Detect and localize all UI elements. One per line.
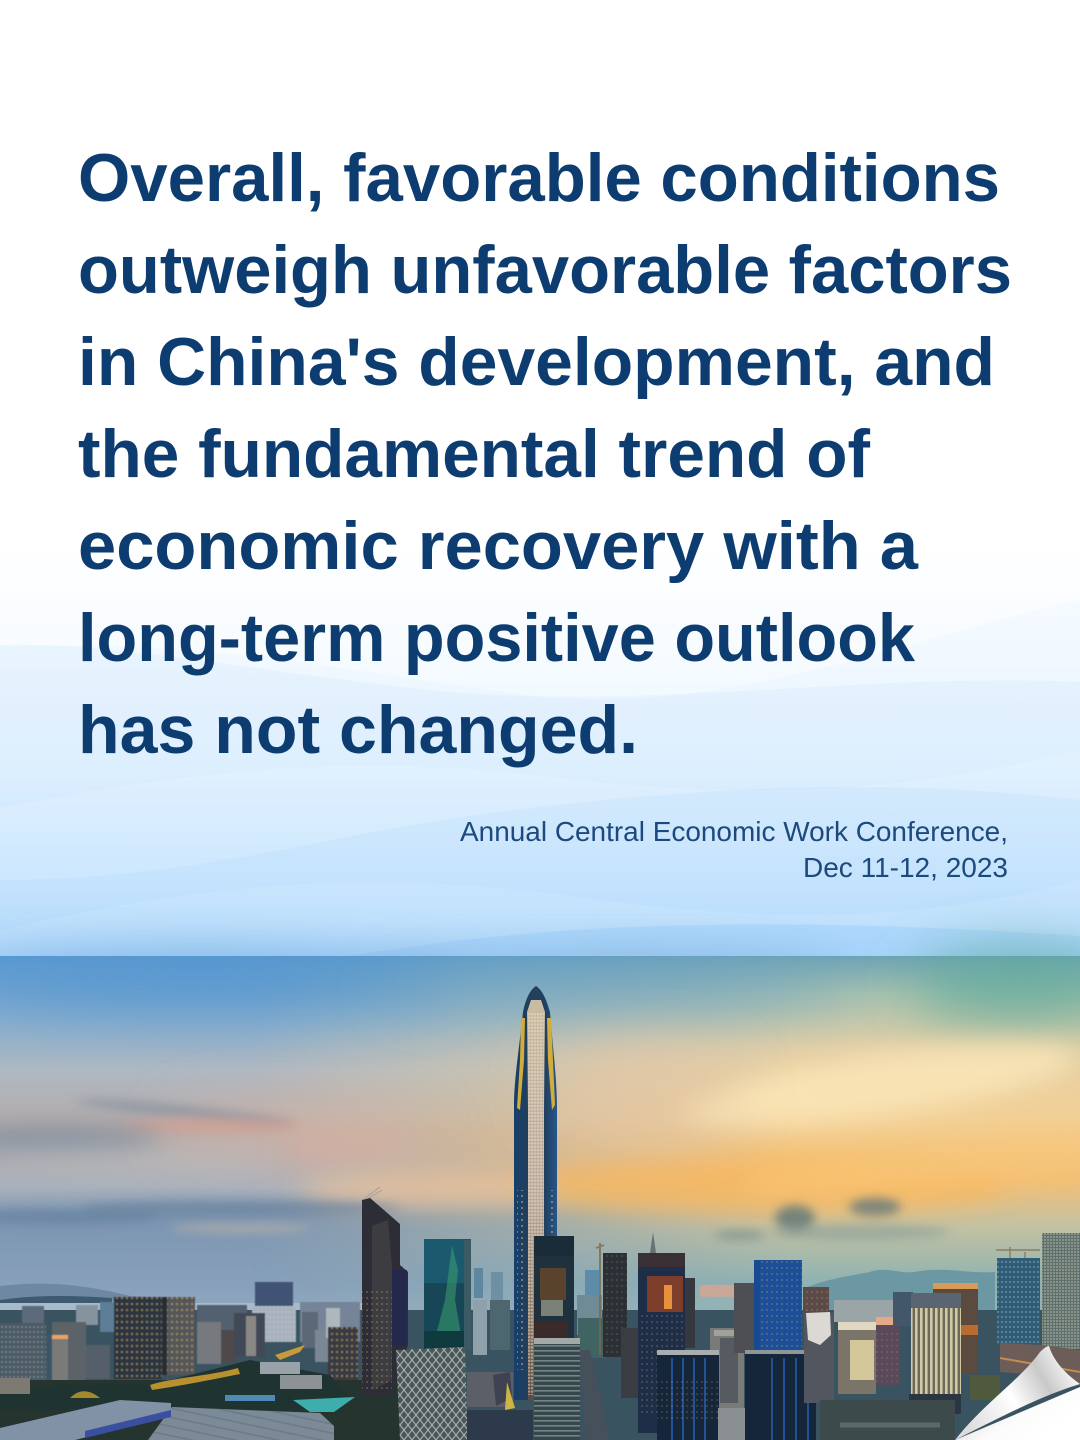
source attribution: Dec 11-12, 2023 — [803, 852, 1008, 883]
left residential towers — [0, 1282, 360, 1384]
title: Overall, favorable conditions — [78, 140, 1000, 216]
lattice facade building — [396, 1347, 533, 1440]
convention centre roofs — [0, 1400, 334, 1440]
sky with sunset clouds — [0, 916, 1080, 1310]
hazy background towers — [473, 1268, 606, 1358]
title: in China's development, and — [78, 324, 995, 400]
source attribution — [460, 816, 1008, 883]
waterfront greenery and lit streets — [0, 1345, 400, 1440]
title: outweigh unfavorable factors — [78, 232, 1012, 308]
panel: light blue wave background — [0, 0, 1080, 956]
central dark towers — [534, 1232, 816, 1440]
title: has not changed. — [78, 692, 638, 768]
green glass tower — [424, 1239, 471, 1350]
dark office tower — [362, 1187, 408, 1395]
page curl corner — [955, 1346, 1080, 1440]
panel: city skyline photo — [0, 949, 1080, 1440]
distant mountains and haze — [0, 1270, 1080, 1440]
title — [78, 140, 1012, 768]
title: the fundamental trend of — [78, 416, 870, 492]
title: long-term positive outlook — [78, 600, 915, 676]
title: economic recovery with a — [78, 508, 919, 584]
Ping An supertall tower — [514, 986, 557, 1400]
source attribution: Annual Central Economic Work Conference, — [460, 816, 1008, 847]
right-hand lit towers — [803, 1233, 1080, 1440]
